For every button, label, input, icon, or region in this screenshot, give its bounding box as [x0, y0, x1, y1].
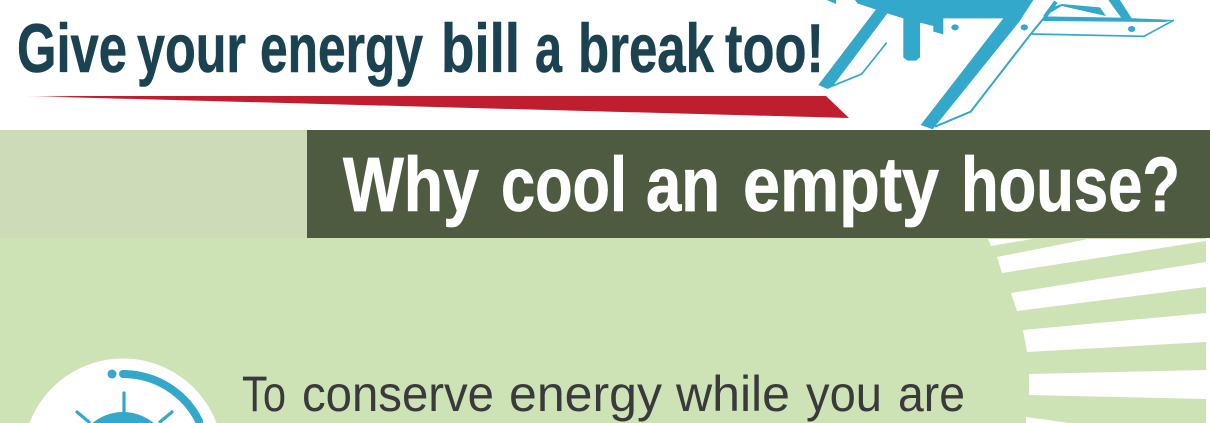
heading: why cool an empty house: empty	[743, 142, 939, 228]
body text	[242, 366, 965, 422]
heading: why cool an empty house: cool	[501, 142, 627, 228]
body text: are	[898, 366, 965, 422]
sun rays	[988, 238, 1210, 423]
heading: why cool an empty house	[343, 142, 1180, 228]
body text: you	[806, 366, 882, 422]
body text: conserve	[302, 366, 494, 422]
red underline swoosh	[22, 96, 849, 118]
heading banner	[307, 130, 1210, 238]
panel: green background	[0, 130, 1210, 423]
title: give your energy bill a break too: a	[535, 10, 562, 87]
title: give your energy bill a break too	[17, 10, 824, 87]
body text: To	[242, 366, 286, 422]
body text: while	[675, 366, 790, 422]
light band behind heading	[0, 130, 307, 238]
title: give your energy bill a break too: your	[137, 10, 246, 87]
body text: energy	[509, 366, 662, 422]
title: give your energy bill a break too: bill	[441, 10, 520, 87]
title: give your energy bill a break too: too!	[725, 10, 824, 87]
title: give your energy bill a break too: energy	[260, 10, 423, 87]
icon: blue air conditioner unit	[818, 0, 1174, 129]
heading: why cool an empty house: an	[646, 142, 720, 228]
heading: why cool an empty house: Why	[343, 142, 479, 228]
title: give your energy bill a break too: break	[578, 10, 714, 87]
icon: thermostat with sun	[30, 358, 216, 423]
title: give your energy bill a break too: Give	[17, 10, 127, 87]
